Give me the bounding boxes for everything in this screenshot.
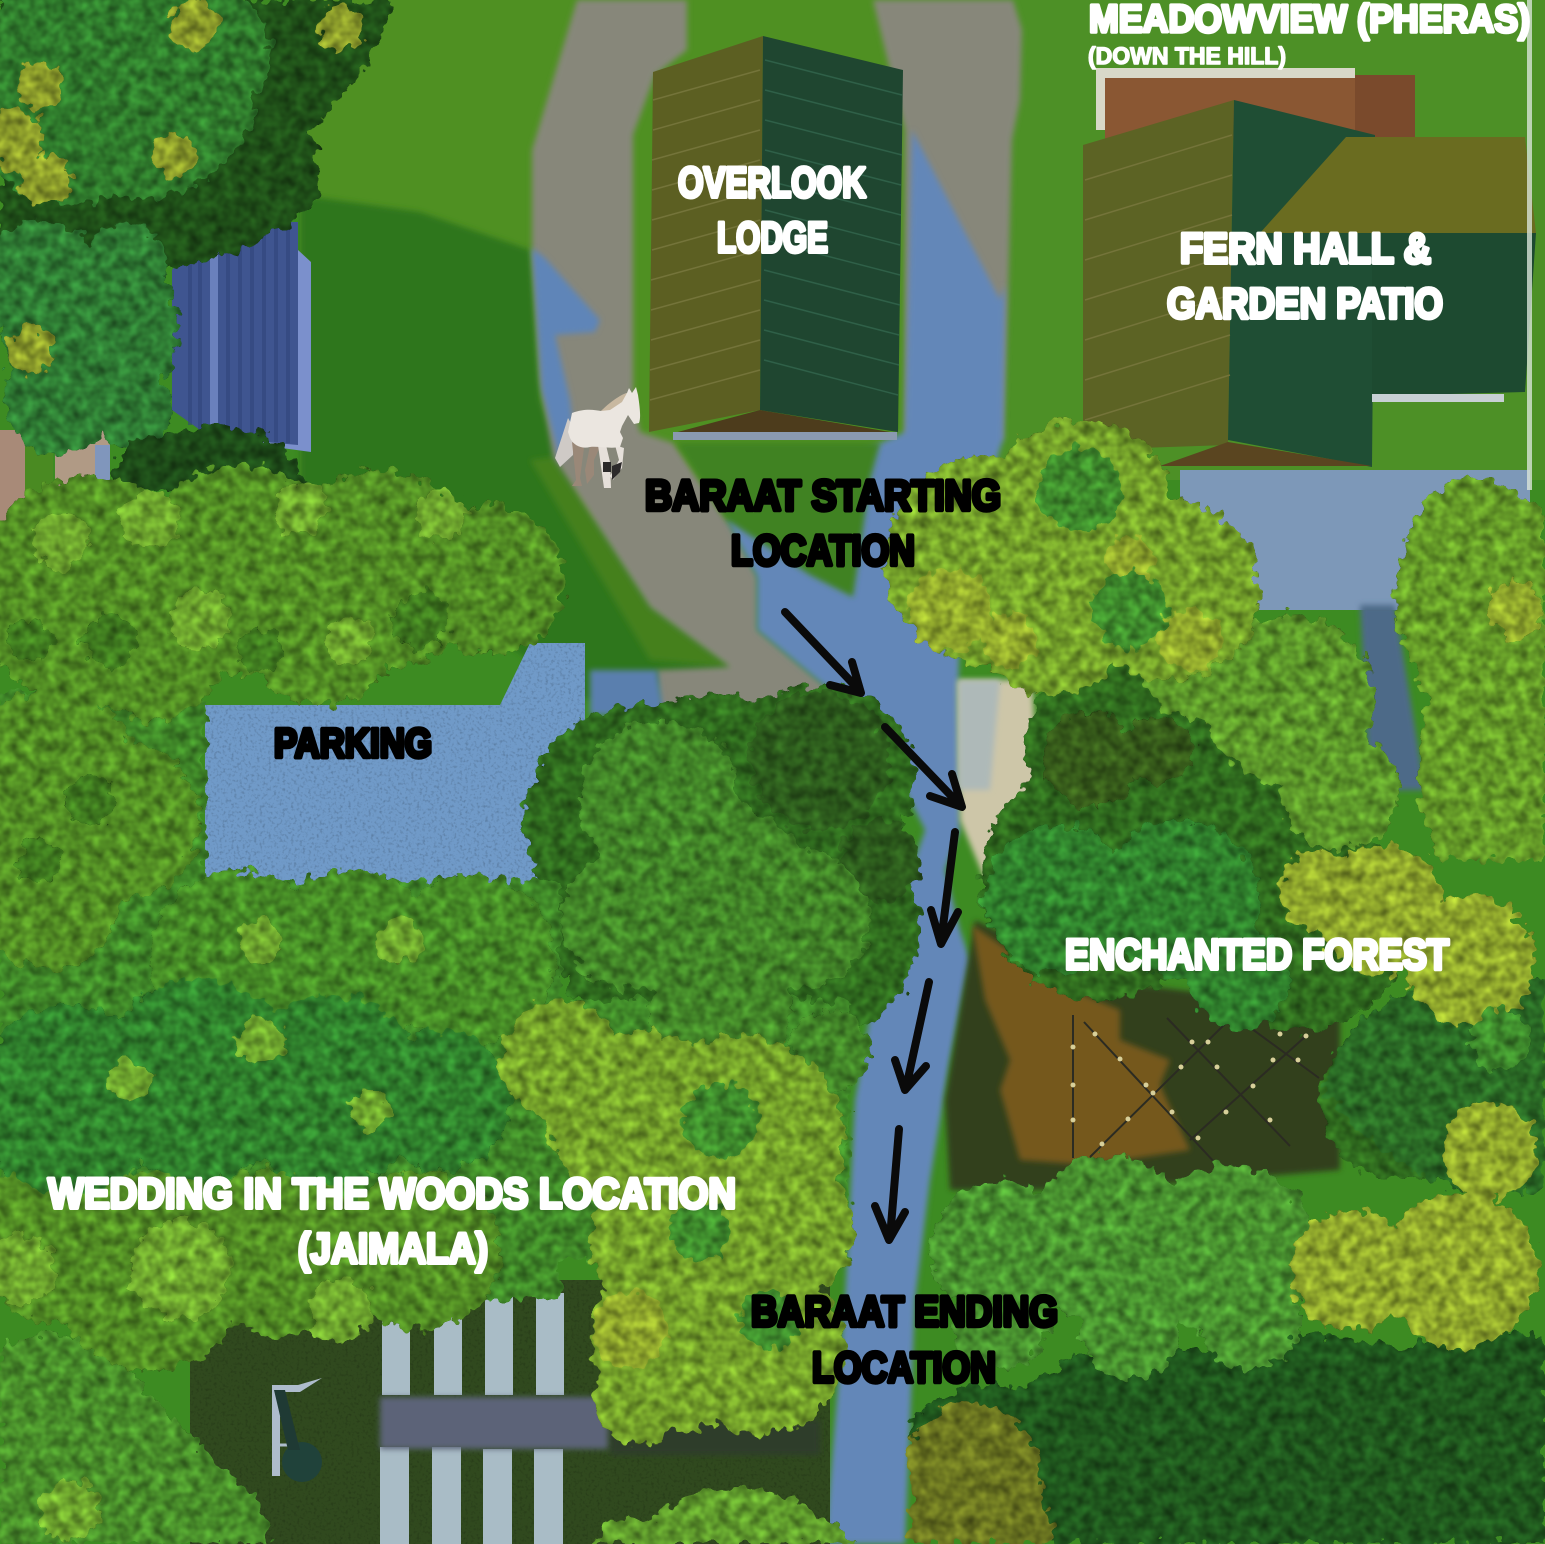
bottom left clearing xyxy=(190,1280,830,1544)
horse tail xyxy=(555,418,575,467)
label: Wedding in the Woods: WEDDING IN THE WOODS LOCATION xyxy=(48,1170,736,1218)
label: down the hill: (DOWN THE HILL) xyxy=(1088,43,1286,70)
building: Overlook Lodge roof xyxy=(649,36,903,440)
label: Fern Hall and Garden Patio: FERN HALL & xyxy=(1180,225,1431,273)
walkway stripes xyxy=(380,1293,608,1544)
label: Fern Hall and Garden Patio xyxy=(1167,225,1443,328)
label: Overlook Lodge xyxy=(678,159,866,262)
grass island xyxy=(677,443,880,597)
label: Baraat ending location: LOCATION xyxy=(812,1344,996,1392)
arrows xyxy=(785,612,962,1240)
horse xyxy=(555,387,640,488)
label: Baraat starting location xyxy=(645,472,1001,575)
label: Overlook Lodge: OVERLOOK xyxy=(678,159,866,207)
building: blue roof xyxy=(172,222,311,452)
arrow 2 xyxy=(885,727,962,807)
label: Fern Hall and Garden Patio: GARDEN PATIO xyxy=(1167,280,1443,328)
horse hind legs xyxy=(572,442,600,486)
arrow 5 xyxy=(875,1129,905,1240)
arrow 4 xyxy=(895,982,929,1090)
label: Wedding in the Woods: (JAIMALA) xyxy=(298,1225,488,1273)
label: Wedding in the Woods xyxy=(48,1170,736,1273)
left tree shadow on gravel xyxy=(532,248,600,462)
building: Fern Hall roof xyxy=(1083,0,1536,490)
building: Meadowview roof xyxy=(1096,68,1415,140)
label: Enchanted Forest: ENCHANTED FOREST xyxy=(1065,931,1449,979)
sidewalk xyxy=(958,680,1040,880)
label: Baraat ending location xyxy=(751,1288,1058,1392)
label: Baraat starting location: LOCATION xyxy=(731,527,915,575)
horse front legs xyxy=(598,445,624,488)
road shadow xyxy=(727,130,1005,1544)
label: Parking: PARKING xyxy=(274,720,432,766)
label: Baraat ending location: BARAAT ENDING xyxy=(751,1288,1058,1336)
arrow 3 xyxy=(931,832,958,944)
trees: mid canopy xyxy=(0,465,1545,1380)
gravel path, right arm xyxy=(873,0,1022,440)
parking xyxy=(205,643,585,900)
clearing xyxy=(945,920,1340,1190)
arrow 1 xyxy=(785,612,861,693)
string lights xyxy=(1070,1014,1319,1165)
label: Baraat starting location: BARAAT STARTING xyxy=(645,472,1001,520)
label: Overlook Lodge: LODGE xyxy=(717,214,828,262)
left edge buildings xyxy=(0,430,110,530)
arch xyxy=(258,1378,322,1482)
horse body xyxy=(568,387,640,448)
far right road xyxy=(1180,470,1530,610)
gravel path, left arm and lower sweep xyxy=(532,0,885,745)
